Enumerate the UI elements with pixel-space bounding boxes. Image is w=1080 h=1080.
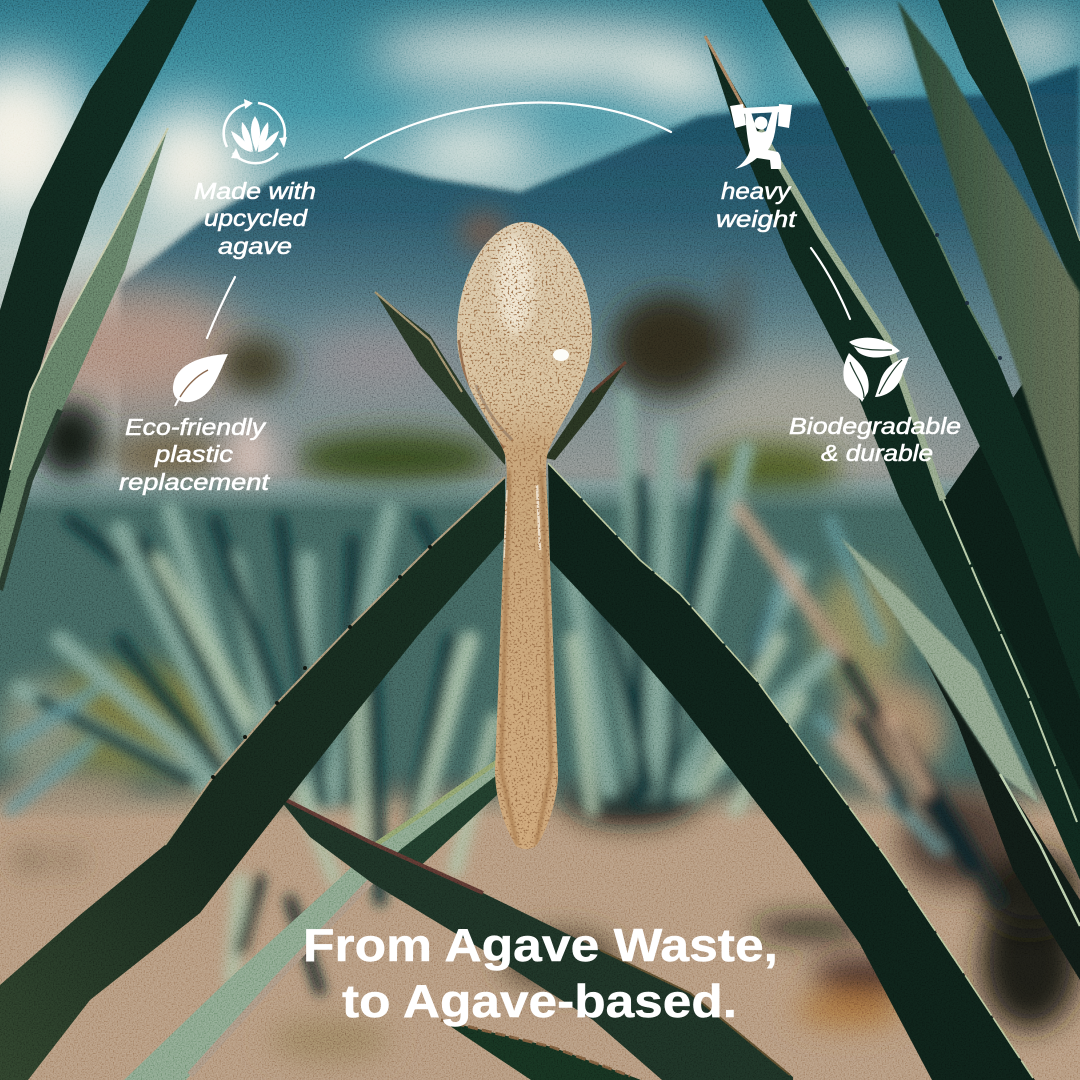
photo background: distant trees <box>34 212 840 498</box>
label: made with upcycled agave: agave <box>218 233 292 259</box>
title <box>303 919 778 1027</box>
connector: agave to eco-friendly <box>207 277 235 338</box>
leaf: bottom centre dark <box>276 795 793 1080</box>
label: eco-friendly plastic replacement: replacement <box>119 469 271 495</box>
icon: leaf <box>173 354 228 406</box>
photo background: ground <box>0 760 1080 1080</box>
label: heavy weight: weight <box>716 206 798 232</box>
photo background: sky and mountains <box>0 0 1080 560</box>
leaf: left slender pale <box>0 128 168 590</box>
leaf: far right dark mass <box>943 300 1080 830</box>
leaf: bottom centre pale <box>124 762 497 1080</box>
spikes: cross left <box>211 545 432 779</box>
label: eco-friendly plastic replacement <box>119 414 271 495</box>
label: eco-friendly plastic replacement: plastic <box>154 441 234 467</box>
leaf: right slender <box>938 0 1080 303</box>
icon: weightlifter <box>730 104 792 169</box>
leaf: lower right pale <box>840 537 1040 804</box>
label: biodegradable and durable: Biodegradable <box>789 413 961 439</box>
leaf: right thin tall <box>705 36 1080 880</box>
photo background: blurred agave field <box>0 400 1080 990</box>
leaf: left top dark <box>0 0 197 530</box>
spikes: right big leaf <box>845 67 1002 360</box>
title: From Agave Waste, <box>303 919 778 971</box>
connector arc: agave to heavy weight <box>345 103 671 158</box>
connector: heavy weight to biodegradable <box>811 248 850 319</box>
label: eco-friendly plastic replacement: Eco-friendly <box>125 414 267 440</box>
label: made with upcycled agave: upcycled <box>204 205 308 231</box>
leaf: right big dark <box>762 0 1080 700</box>
leaf: cross right <box>548 463 1035 1080</box>
spoon shading <box>497 235 533 335</box>
icon: biodegradable leaves <box>843 338 909 402</box>
leaf: tips behind bowl <box>375 292 505 465</box>
leaf: right muted <box>897 0 1080 560</box>
label: made with upcycled agave: Made with <box>194 178 316 204</box>
label: biodegradable and durable <box>789 413 961 466</box>
label: heavy weight: heavy <box>721 178 792 204</box>
label: heavy weight <box>716 178 798 232</box>
leaf: lower right shadow <box>923 655 1080 980</box>
spoon <box>457 222 592 849</box>
title: to Agave-based. <box>342 975 737 1027</box>
label: made with upcycled agave <box>194 178 316 259</box>
icon: upcycled agave <box>224 99 287 163</box>
label: biodegradable and durable: & durable <box>821 440 933 466</box>
leaf: bottom small <box>393 1007 641 1080</box>
leaf: cross left <box>0 477 505 1080</box>
